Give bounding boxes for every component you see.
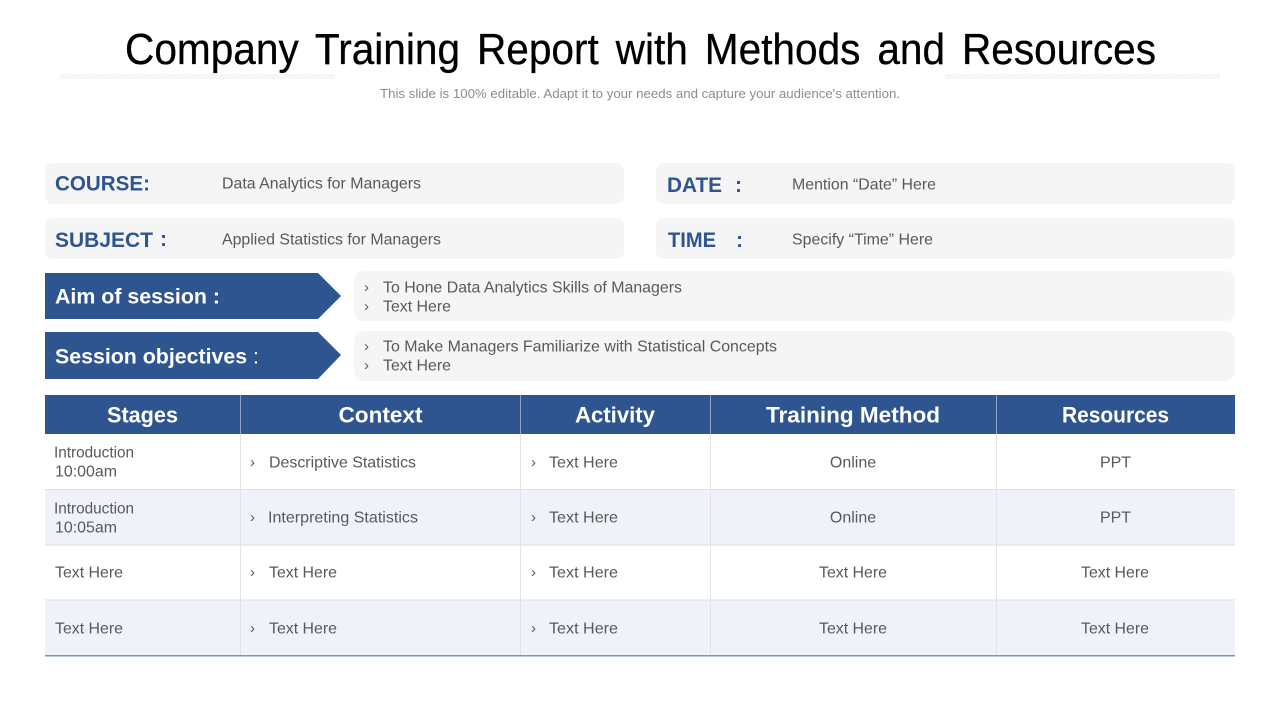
- row 2: PPT: [1100, 510, 1131, 526]
- panel: time: TIME: [668, 229, 716, 252]
- row 3: ›: [531, 564, 536, 581]
- arrow: aim of session: Aim of session :: [55, 286, 220, 308]
- table row backgrounds: [45, 434, 1235, 656]
- row 3: ›: [250, 564, 255, 581]
- panel: objectives details: ›: [364, 338, 369, 355]
- row 2: [54, 500, 1131, 536]
- row 4: Text Here: [55, 620, 123, 638]
- table header: Activity: [575, 402, 656, 428]
- panel: objectives details: [354, 331, 1235, 381]
- table header: Stages: [107, 402, 178, 428]
- row 2: ›: [531, 509, 536, 526]
- panel: time: [656, 218, 1235, 259]
- panel: date: :: [735, 174, 742, 197]
- arrow: aim of session: [45, 273, 341, 319]
- row 1: Descriptive Statistics: [269, 454, 416, 472]
- panel: date: DATE: [667, 174, 722, 197]
- panel: subject: [45, 218, 624, 259]
- panel: objectives details: To Make Managers Familiarize with Statistical Concepts: [383, 338, 777, 356]
- panel: objectives details: ›: [364, 357, 369, 374]
- panel: course: [45, 163, 624, 204]
- subtitle: This slide is 100% editable. Adapt it to your needs and capture your audience's attention.: [380, 87, 900, 101]
- row 3: Text Here: [269, 564, 337, 582]
- panel: subject: SUBJECT: [55, 229, 153, 252]
- panel: aim details: [354, 271, 1235, 321]
- row 4: ›: [531, 620, 536, 637]
- panel: aim details: ›: [364, 279, 369, 296]
- panel: aim details: ›: [364, 298, 369, 315]
- arrow: session objectives: [45, 332, 341, 379]
- row 1: 10:00am: [55, 464, 117, 480]
- panel: date: Mention “Date” Here: [792, 176, 936, 194]
- row 3: [55, 564, 1149, 582]
- table header: Training Method: [766, 402, 940, 428]
- row 4: Text Here: [819, 620, 887, 638]
- panel: time: :: [736, 229, 743, 252]
- row 2: Text Here: [549, 510, 618, 526]
- panel: subject: Applied Statistics for Managers: [222, 232, 441, 248]
- row 1: Text Here: [549, 454, 618, 472]
- panel: aim details: To Hone Data Analytics Skills of Managers: [383, 280, 682, 296]
- panel: time: Specify “Time” Here: [792, 232, 933, 248]
- row 3: Text Here: [549, 564, 618, 582]
- row 4: ›: [250, 620, 255, 637]
- row 4: Text Here: [549, 620, 618, 638]
- table header: Resources: [1062, 402, 1169, 428]
- row 4: Text Here: [269, 620, 337, 638]
- row 1: ›: [250, 454, 255, 471]
- row 3: Text Here: [819, 564, 887, 582]
- row 1: Online: [830, 454, 876, 472]
- row 1: ›: [531, 454, 536, 471]
- row 2: ›: [250, 509, 255, 526]
- panel: date: [656, 163, 1235, 204]
- row 2: 10:05am: [55, 520, 117, 536]
- row 1: [54, 444, 1131, 480]
- panel: course: COURSE:: [55, 172, 150, 196]
- row 3: Text Here: [1081, 564, 1149, 582]
- row 2: Introduction: [54, 500, 134, 518]
- panel: course: Data Analytics for Managers: [222, 176, 421, 192]
- row 1: PPT: [1100, 454, 1131, 472]
- panel: aim details: Text Here: [383, 298, 451, 316]
- row 1: Introduction: [54, 444, 134, 462]
- row 4: [55, 620, 1149, 638]
- title: Company Training Report with Methods and Resources: [125, 26, 1156, 74]
- panel: objectives details: Text Here: [383, 358, 451, 374]
- row 2: Interpreting Statistics: [268, 510, 418, 526]
- arrow: session objectives: Session objectives :: [55, 346, 259, 368]
- row 2: Online: [830, 510, 876, 526]
- table header: Context: [338, 402, 423, 428]
- panel: subject: :: [160, 228, 167, 251]
- row 3: Text Here: [55, 564, 123, 582]
- row 4: Text Here: [1081, 620, 1149, 638]
- table: [45, 395, 1235, 656]
- table header: [45, 395, 1235, 434]
